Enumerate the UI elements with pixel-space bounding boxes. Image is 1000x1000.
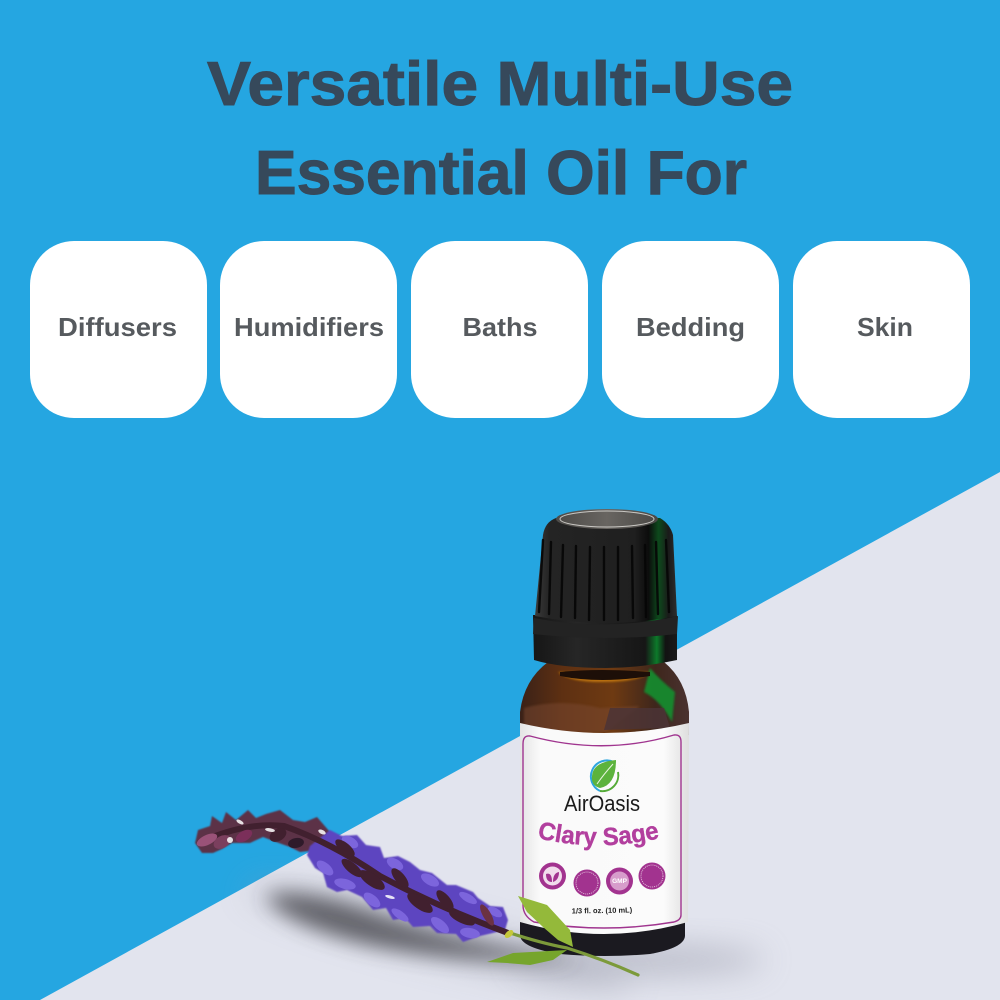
card: Diffusers: Diffusers [58,312,177,342]
card: Humidifiers: Humidifiers [234,312,384,342]
bottle: knurled cap [535,518,677,623]
label: Air Oasis logo [564,760,640,816]
card: Bedding [602,241,779,418]
background: grey diagonal panel [40,472,1000,1000]
bottle: amber glass [520,662,689,735]
bottle: label [520,723,689,934]
sprig: green stem [504,931,638,975]
bottle: cap top disc [556,509,658,529]
label: certification badges: GMP [612,878,628,885]
clary sage sprig [195,810,638,975]
label: volume text: 1/3 fl. oz. (10 mL) [572,905,633,916]
sprig: white highlights between florets [227,818,395,900]
label: product name: Clary Sage [539,822,658,850]
sprig: flower tip silhouette [195,810,330,853]
ground shadows [241,868,765,1000]
card: Humidifiers [220,241,397,418]
bottle: cap band [533,616,678,638]
sprig: lighter blossoms [314,833,504,940]
label: certification badges [539,862,666,896]
label: purple border [523,735,681,928]
card: Baths [411,241,588,418]
title [207,50,793,208]
card: Bedding: Bedding [636,312,745,342]
card: Baths: Baths [462,312,538,342]
essential oil bottle [520,509,689,956]
use cards row [30,241,970,418]
bottle: cap ridges [539,540,669,620]
sprig: lower leaf [487,950,567,965]
label: Air Oasis logo: AirOasis [564,791,640,816]
sprig: maroon calyxes and stalk [195,825,508,933]
card: Diffusers [30,241,207,418]
title: Essential Oil For [255,139,747,208]
bottle: dark base [520,918,685,956]
sprig: purple blossom silhouette [307,830,508,942]
sprig: upper leaf [518,896,573,947]
bottle: cap collar [533,615,677,668]
bottle: glass reflections [524,668,675,732]
card: Skin: Skin [857,312,913,342]
card: Skin [793,241,970,418]
sprig: yellow bud at stem joint [503,928,515,940]
title: Versatile Multi-Use [207,50,793,119]
